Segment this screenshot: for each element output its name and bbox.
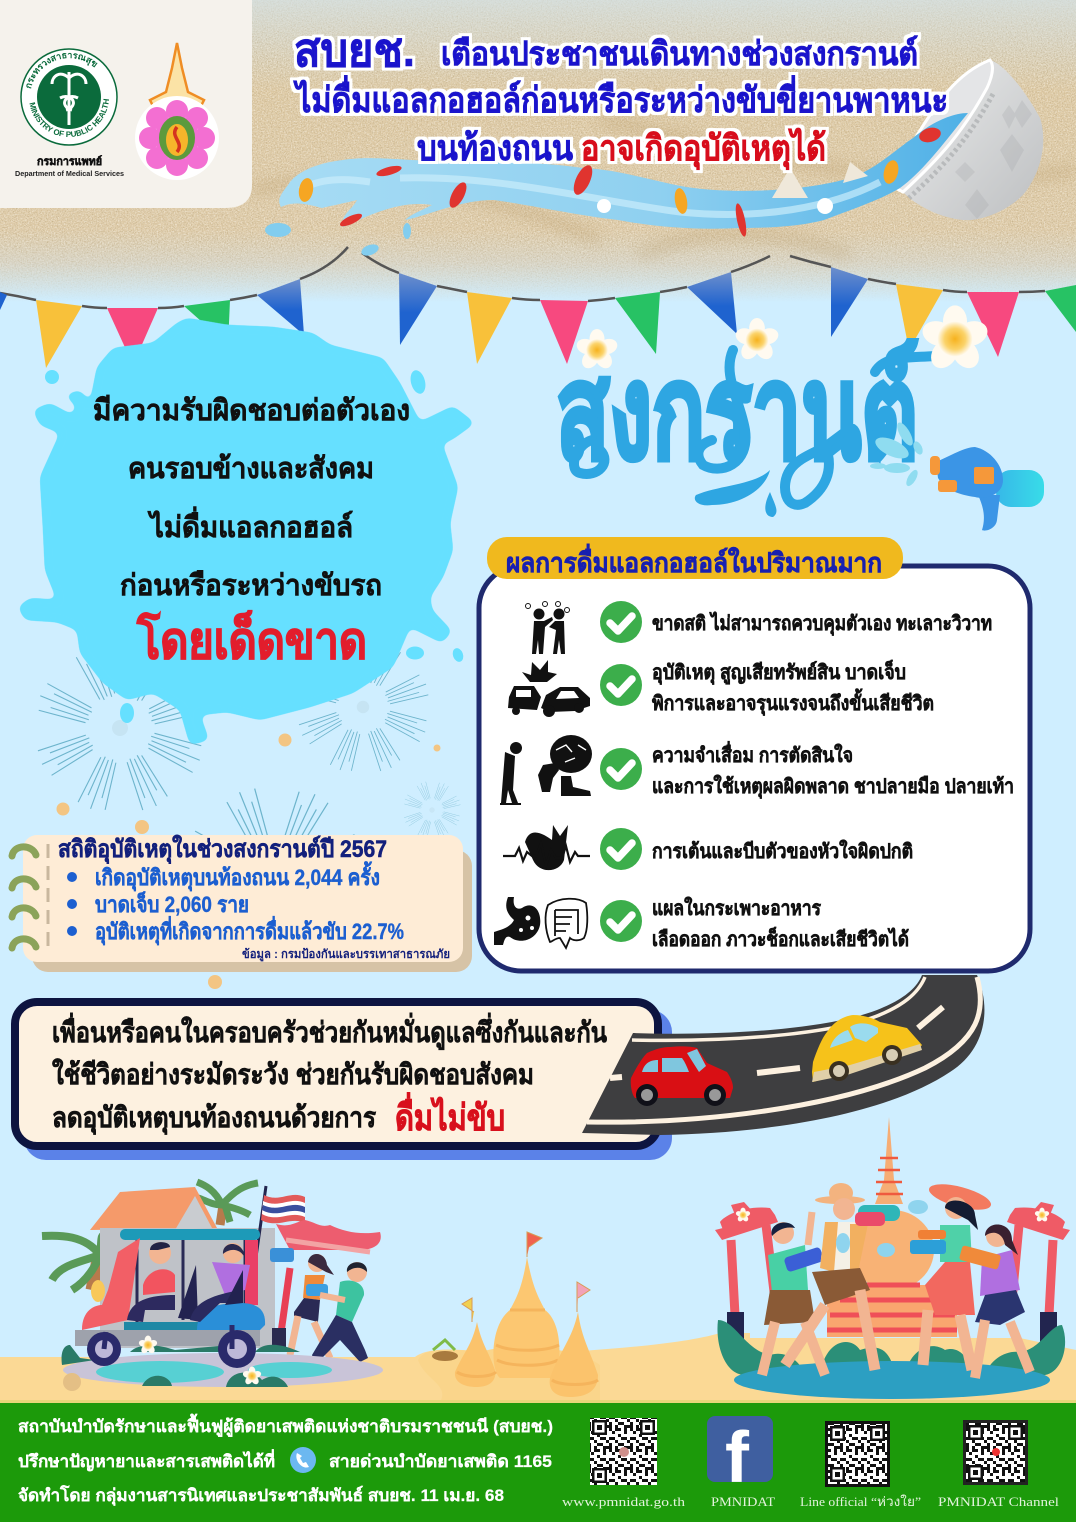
text row 5: เลือดออก ภาวะช็อกและเสียชีวิตได้ bbox=[652, 926, 909, 951]
panel: effects of heavy drinking bbox=[479, 537, 1030, 971]
panel: callout message: เพื่อนหรือคนในครอบครัวช่วยกันหมั่นดูแลซึ่งกันและกัน bbox=[52, 1012, 607, 1050]
panel: statistics notebook bbox=[12, 834, 472, 972]
temple house bbox=[90, 1187, 275, 1348]
panel: statistics notebook: เกิดอุบัติเหตุบนท้องถนน 2,044 ครั้ง bbox=[95, 861, 380, 892]
icon: facebook: PMNIDAT bbox=[711, 1494, 775, 1509]
footer text: จัดทำโดย กลุ่มงานสารนิเทศและประชาสัมพันธ์ สบยช. 11 เม.ย. 68 bbox=[18, 1485, 504, 1506]
songkran lettering: สงกรานต์ bbox=[556, 339, 918, 486]
boy running bbox=[312, 1262, 368, 1365]
qr code line bbox=[800, 1421, 921, 1509]
check mark 1 bbox=[600, 601, 642, 643]
icon: car crash bbox=[508, 660, 590, 717]
text row 5: แผลในกระเพาะอาหาร bbox=[652, 896, 821, 920]
icon: quarrel bbox=[526, 602, 570, 654]
main title: สบยช. bbox=[294, 24, 415, 76]
icon: phone bbox=[290, 1447, 316, 1473]
logo: ministry of public health: Department of Medical Services bbox=[15, 171, 124, 178]
text row 4: การเต้นและบีบตัวของหัวใจผิดปกติ bbox=[652, 839, 913, 863]
text row 3 bbox=[652, 740, 1014, 799]
check mark 3 bbox=[600, 748, 642, 790]
fireworks decoration bbox=[35, 641, 461, 989]
tuk-tuk bbox=[75, 1229, 265, 1346]
flag string bunting bbox=[0, 247, 1076, 368]
splash text: ไม่ดื่มแอลกอฮอล์ bbox=[147, 506, 353, 544]
splash text: โดยเด็ดขาด bbox=[136, 610, 367, 669]
logo: ministry of public health: MINISTRY OF PUBLIC HEALTH bbox=[30, 98, 109, 137]
bushes bbox=[717, 1320, 1065, 1375]
qr code website: www.pmnidat.go.th bbox=[562, 1494, 686, 1509]
girl with gun bbox=[959, 1224, 1030, 1378]
main title: เตือนประชาชนเดินทางช่วงสงกรานต์ bbox=[441, 35, 918, 72]
water stream with petals bbox=[265, 113, 968, 258]
footer text: สายด่วนบำบัดยาเสพติด 1165 bbox=[329, 1452, 552, 1471]
panel: callout message: ใช้ชีวิตอย่างระมัดระวัง ช่วยกันรับผิดชอบสังคม bbox=[52, 1058, 534, 1090]
text row 2: อุบัติเหตุ สูญเสียทรัพย์สิน บาดเจ็บ bbox=[652, 659, 906, 686]
qr code channel: PMNIDAT Channel bbox=[938, 1494, 1059, 1509]
icon: heart with ecg bbox=[503, 825, 590, 870]
panel: statistics notebook: อุบัติเหตุที่เกิดจากการดื่มแล้วขับ 22.7% bbox=[95, 915, 404, 946]
illustration: tuk-tuk and family bbox=[42, 1182, 383, 1391]
splash panel with message bbox=[18, 318, 475, 745]
text row 3: และการใช้เหตุผลผิดพลาด ชาปลายมือ ปลายเท้า bbox=[652, 774, 1014, 799]
icon: dizzy person, brain, numb limbs bbox=[500, 735, 592, 805]
main title: บนท้องถนน bbox=[417, 129, 573, 168]
main title bbox=[293, 24, 948, 170]
splash text: ก่อนหรือระหว่างขับรถ bbox=[120, 570, 382, 602]
panel: statistics notebook: ข้อมูล : กรมป้องกันและบรรเทาสาธารณภัย bbox=[242, 947, 450, 962]
footer text: สถาบันบำบัดรักษาและฟื้นฟูผู้ติดยาเสพติดแห่งชาติบรมราชชนนี (สบยช.) bbox=[18, 1413, 553, 1438]
icon: plumeria flowers bbox=[575, 305, 991, 373]
woman with hat bbox=[910, 1179, 993, 1370]
text row 5 bbox=[652, 896, 909, 951]
silver bowl bbox=[880, 60, 1043, 220]
logo: thanyarak institute bbox=[135, 43, 219, 180]
sand ground bbox=[0, 1333, 1076, 1402]
palm trees bbox=[42, 1182, 258, 1290]
arch gates bbox=[715, 1202, 1070, 1342]
car: yellow bbox=[812, 1015, 922, 1082]
text row 3: ความจำเสื่อม การตัดสินใจ bbox=[652, 740, 853, 767]
passenger woman bbox=[190, 1243, 250, 1322]
panel: callout message: ดื่มไม่ขับ bbox=[395, 1092, 505, 1138]
panel: callout message bbox=[15, 1002, 672, 1160]
splash text: มีความรับผิดชอบต่อตัวเอง bbox=[93, 395, 410, 427]
ground puddle bbox=[62, 1325, 383, 1391]
red arch gate bbox=[272, 1220, 381, 1352]
footer text: ปรึกษาปัญหายาและสารเสพติดได้ที่ bbox=[18, 1449, 275, 1472]
logo: ministry of public health bbox=[15, 48, 124, 178]
footer bar bbox=[0, 1400, 1076, 1522]
splash text: คนรอบข้างและสังคม bbox=[128, 453, 374, 485]
illustration: temple and water fight bbox=[715, 1117, 1070, 1399]
qr code website bbox=[562, 1418, 686, 1509]
logo: ministry of public health: กรมการแพทย์ bbox=[37, 155, 102, 168]
logo panel bbox=[0, 0, 252, 208]
splash text bbox=[93, 395, 410, 669]
thai flag bbox=[250, 1186, 305, 1300]
girl with water gun bbox=[270, 1248, 334, 1358]
heading pill bbox=[487, 537, 903, 579]
check mark 4 bbox=[600, 828, 642, 870]
panel: statistics notebook: บาดเจ็บ 2,060 ราย bbox=[95, 890, 249, 917]
text row 2: พิการและอาจรุนแรงจนถึงขั้นเสียชีวิต bbox=[652, 688, 934, 716]
car: red bbox=[631, 1046, 733, 1106]
panel: statistics notebook: สถิติอุบัติเหตุในช่วงสงกรานต์ปี 2567 bbox=[58, 834, 387, 865]
qr code line: Line official “ห่วงใย” bbox=[800, 1494, 921, 1509]
logo: ministry of public health: กระทรวงสาธารณสุข bbox=[26, 52, 98, 88]
man with hat bbox=[785, 1183, 900, 1370]
road with cars bbox=[582, 975, 984, 1135]
heading pill: ผลการดื่มแอลกอฮอล์ในปริมาณมาก bbox=[506, 543, 882, 578]
sand header background bbox=[0, 0, 1076, 302]
water pool bbox=[734, 1361, 1050, 1399]
icon: water gun bbox=[870, 420, 1044, 531]
lettering swashes bbox=[574, 350, 935, 505]
boy with gun bbox=[762, 1212, 825, 1375]
text row 2 bbox=[652, 659, 934, 716]
illustration: sand castles bbox=[418, 1232, 600, 1402]
panel: callout message: ลดอุบัติเหตุบนท้องถนนด้วยการ bbox=[52, 1102, 376, 1135]
driver bbox=[127, 1242, 198, 1322]
footer text bbox=[18, 1413, 553, 1506]
main title: ไม่ดื่มแอลกอฮอล์ก่อนหรือระหว่างขับขี่ยานพาหนะ bbox=[293, 75, 948, 120]
check mark 2 bbox=[600, 664, 642, 706]
icon: facebook bbox=[707, 1416, 775, 1509]
icon: facebook: f bbox=[725, 1418, 750, 1498]
main title: อาจเกิดอุบัติเหตุได้ bbox=[581, 127, 826, 170]
check mark 5 bbox=[600, 900, 642, 942]
text row 1: ขาดสติ ไม่สามารถควบคุมตัวเอง ทะเลาะวิวาท bbox=[652, 611, 992, 636]
qr code channel bbox=[938, 1420, 1059, 1509]
water splashes bbox=[836, 1200, 928, 1257]
temple bbox=[827, 1117, 957, 1337]
icon: stomach and intestines bbox=[494, 897, 587, 948]
